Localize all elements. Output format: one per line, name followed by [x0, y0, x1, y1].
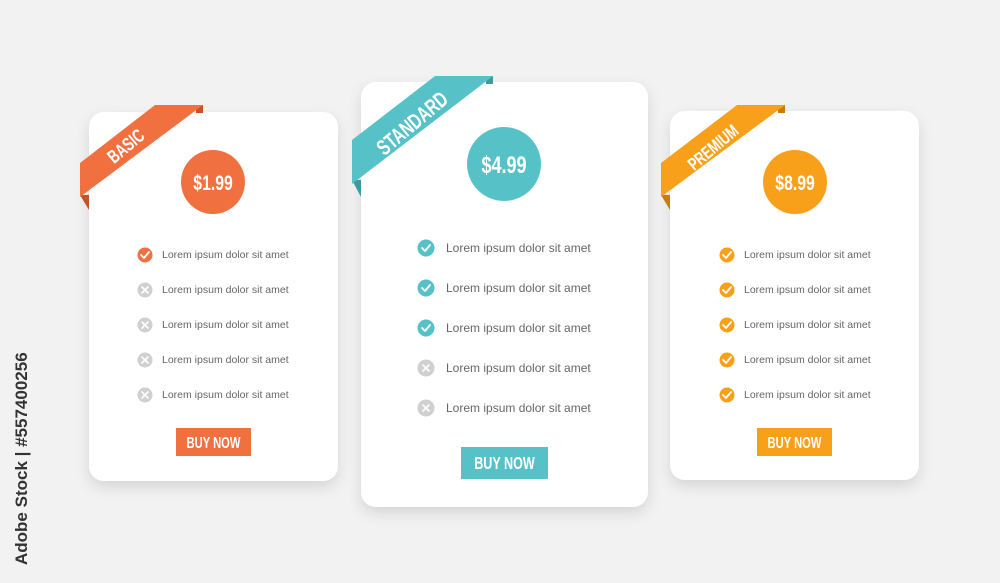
- feature list: standard: Lorem ipsum dolor sit amet: [446, 321, 591, 335]
- feature list: basic: Lorem ipsum dolor sit amet: [162, 284, 289, 296]
- button: basic: [176, 428, 251, 456]
- feature list: basic: Lorem ipsum dolor sit amet: [162, 249, 289, 261]
- button: premium: BUY NOW: [768, 433, 822, 451]
- price circle: basic: $1.99: [193, 171, 233, 195]
- panel: basic: [80, 105, 338, 481]
- ribbon: standard: STANDARD: [372, 87, 453, 161]
- feature list: premium: Lorem ipsum dolor sit amet: [744, 249, 871, 261]
- feature list: basic: Lorem ipsum dolor sit amet: [162, 319, 289, 331]
- price circle: standard: $4.99: [481, 153, 527, 179]
- ribbon: premium: PREMIUM: [685, 121, 743, 175]
- button: standard: BUY NOW: [474, 454, 535, 474]
- button: premium: [757, 428, 832, 456]
- price circle: premium: $8.99: [775, 171, 815, 195]
- feature list: standard: [418, 240, 591, 416]
- feature list: basic: Lorem ipsum dolor sit amet: [162, 354, 289, 366]
- feature list: standard: Lorem ipsum dolor sit amet: [446, 241, 591, 255]
- watermark side text: Adobe Stock | #557400256: [12, 352, 31, 565]
- feature list: basic: Lorem ipsum dolor sit amet: [162, 389, 289, 401]
- feature list: premium: [720, 248, 871, 402]
- feature list: premium: Lorem ipsum dolor sit amet: [744, 284, 871, 296]
- ribbon: standard: [352, 76, 493, 197]
- ribbon: basic: BASIC: [104, 125, 149, 168]
- feature list: premium: Lorem ipsum dolor sit amet: [744, 354, 871, 366]
- price circle: premium: [763, 150, 827, 214]
- button: basic: BUY NOW: [187, 433, 241, 451]
- feature list: standard: Lorem ipsum dolor sit amet: [446, 401, 591, 415]
- feature list: premium: Lorem ipsum dolor sit amet: [744, 389, 871, 401]
- price circle: standard: [467, 127, 541, 201]
- ribbon: basic: [80, 105, 203, 210]
- feature list: standard: Lorem ipsum dolor sit amet: [446, 281, 591, 295]
- feature list: premium: Lorem ipsum dolor sit amet: [744, 319, 871, 331]
- button: standard: [461, 447, 548, 479]
- panel: premium: [661, 105, 919, 480]
- ribbon: premium: [661, 105, 785, 210]
- price circle: basic: [181, 150, 245, 214]
- panel: standard: [352, 76, 648, 507]
- feature list: basic: [138, 248, 289, 402]
- feature list: standard: Lorem ipsum dolor sit amet: [446, 361, 591, 375]
